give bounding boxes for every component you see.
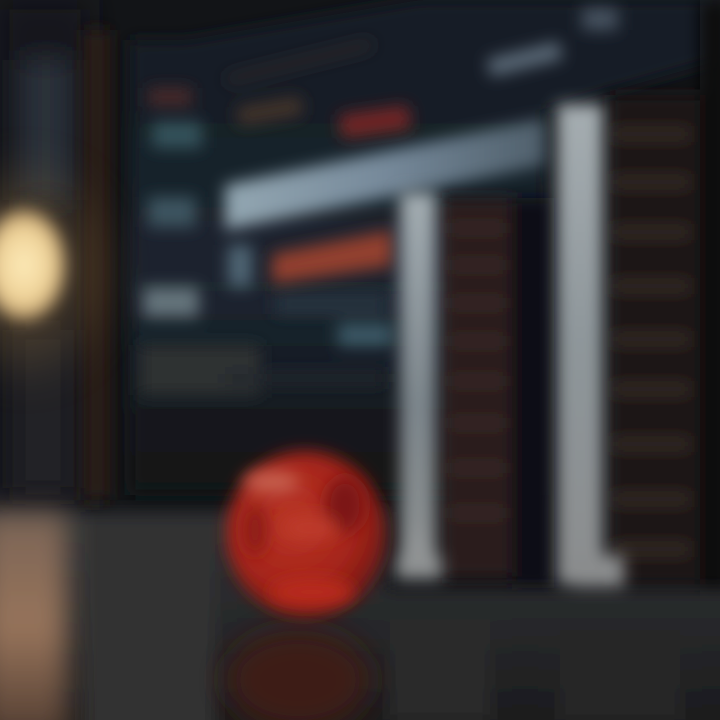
text block: blurred board writing (140, 8, 618, 395)
panel: floor (0, 512, 720, 720)
panel: wooden column (84, 30, 110, 500)
panel: tan floor reflection (0, 512, 68, 720)
panel: left window (0, 0, 90, 510)
panel: chalkboard (130, 0, 720, 495)
panel: right bookcase (610, 0, 720, 600)
panel: dark bookcase middle (442, 198, 554, 588)
icon: red apple reflection (226, 630, 370, 720)
icon: white pillar left (396, 192, 442, 579)
icon: red apple (226, 451, 386, 617)
icon: white pillar right (557, 104, 624, 587)
chart: pale band (225, 118, 545, 230)
chart: red bar (272, 230, 392, 284)
icon: lamp glow (0, 175, 100, 365)
